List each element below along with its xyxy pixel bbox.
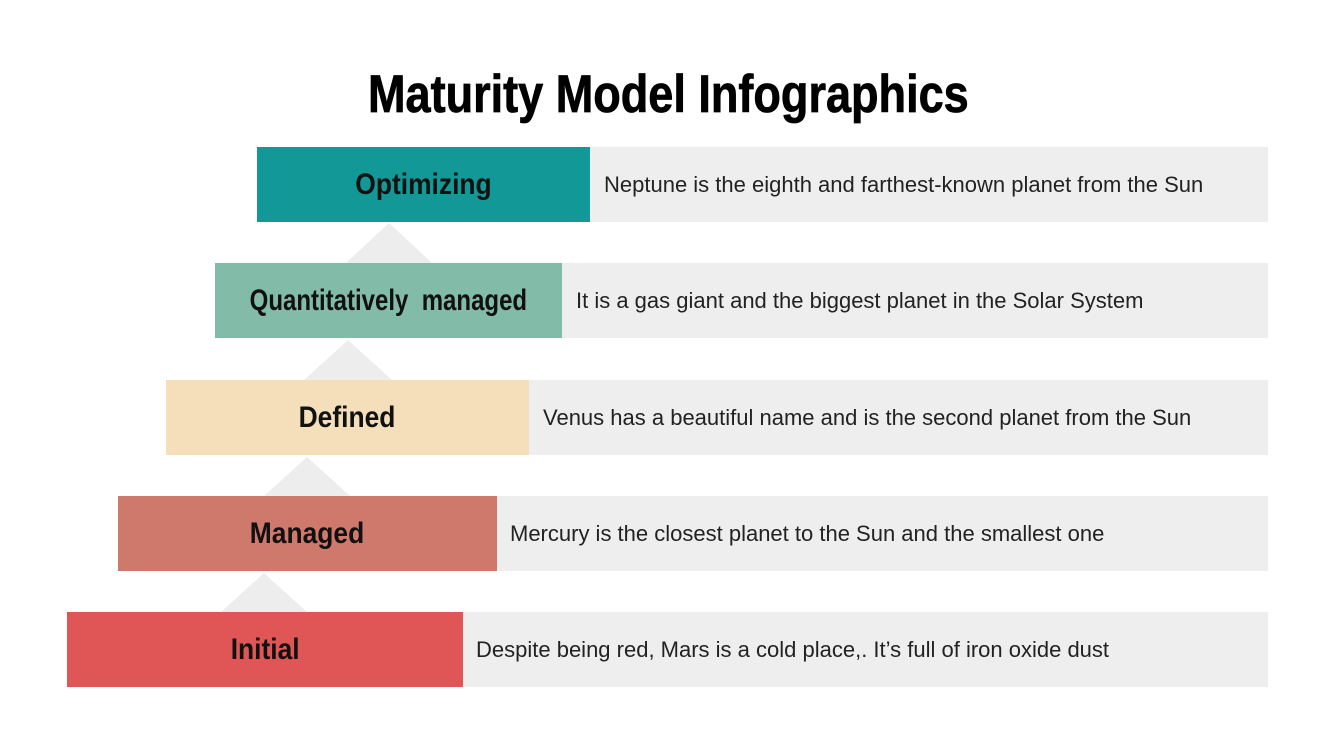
text: quantitatively managed: It is a gas giant and the biggest planet in the Solar System: [576, 288, 1143, 312]
title: Maturity Model Infographics: [368, 65, 968, 124]
row: managed: [118, 496, 1268, 571]
label: initial: [67, 612, 463, 687]
label: managed: [118, 496, 497, 571]
label: defined: Defined: [299, 400, 396, 434]
row: optimizing: [257, 147, 1268, 222]
label: quantitatively managed: [215, 263, 562, 338]
label: managed: Managed: [250, 516, 365, 550]
row: quantitatively managed: [215, 263, 1268, 338]
label: optimizing: [257, 147, 590, 222]
label: optimizing: Optimizing: [355, 168, 492, 200]
text: defined: Venus has a beautiful name and is the second planet from the Sun: [543, 404, 1191, 430]
label: quantitatively managed: Quantitatively managed: [250, 284, 527, 316]
label: defined: [166, 380, 529, 455]
text: managed: Mercury is the closest planet to the Sun and the smallest one: [510, 520, 1104, 546]
row: defined: [166, 380, 1268, 455]
text: optimizing: Neptune is the eighth and farthest-known planet from the Sun: [604, 172, 1203, 196]
label: initial: Initial: [231, 632, 299, 666]
row: initial: [67, 612, 1268, 687]
text: initial: Despite being red, Mars is a cold place,. It’s full of iron oxide dust: [476, 636, 1109, 662]
